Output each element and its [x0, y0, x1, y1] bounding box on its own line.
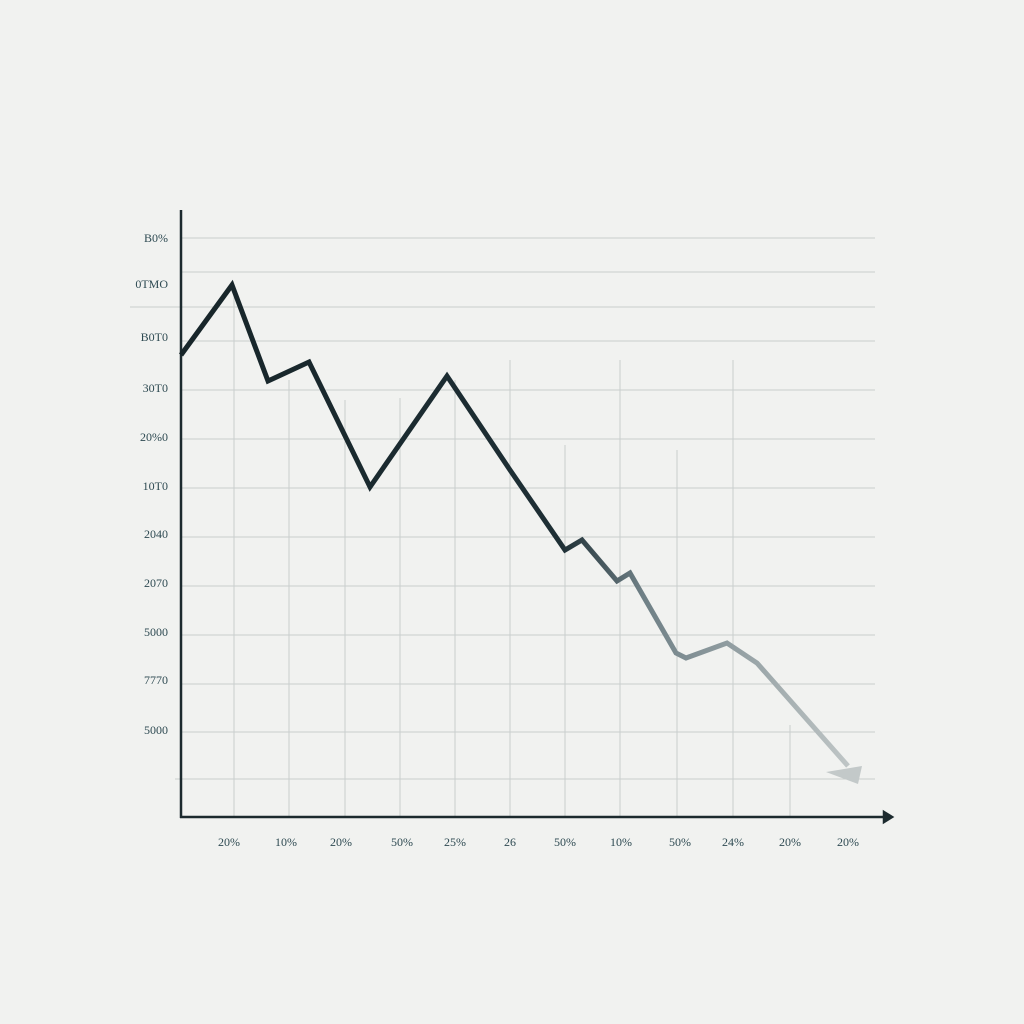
y-axis labels: B0% [144, 231, 168, 245]
y-axis labels: 20%0 [140, 430, 168, 444]
x-axis labels: 50% [669, 835, 691, 849]
y-axis labels: B0T0 [141, 330, 168, 344]
x-axis labels: 10% [610, 835, 632, 849]
x-axis labels: 10% [275, 835, 297, 849]
y-axis labels [135, 231, 168, 737]
y-axis labels: 7770 [144, 673, 168, 687]
y-axis labels: 0TMO [135, 277, 168, 291]
y-axis labels: 5000 [144, 625, 168, 639]
axes [180, 210, 892, 822]
x-axis labels: 20% [330, 835, 352, 849]
x-axis labels: 20% [779, 835, 801, 849]
y-axis labels: 2040 [144, 527, 168, 541]
y-axis labels: 10T0 [143, 479, 168, 493]
y-axis labels: 5000 [144, 723, 168, 737]
x-axis labels: 24% [722, 835, 744, 849]
x-axis labels: 20% [837, 835, 859, 849]
x-axis labels: 25% [444, 835, 466, 849]
x-axis labels [218, 835, 859, 849]
trend line with arrow [181, 285, 862, 784]
x-axis labels: 50% [554, 835, 576, 849]
x-axis labels: 50% [391, 835, 413, 849]
y-axis labels: 30T0 [143, 381, 168, 395]
x-axis labels: 20% [218, 835, 240, 849]
x-axis labels: 26 [504, 835, 516, 849]
y-axis labels: 2070 [144, 576, 168, 590]
